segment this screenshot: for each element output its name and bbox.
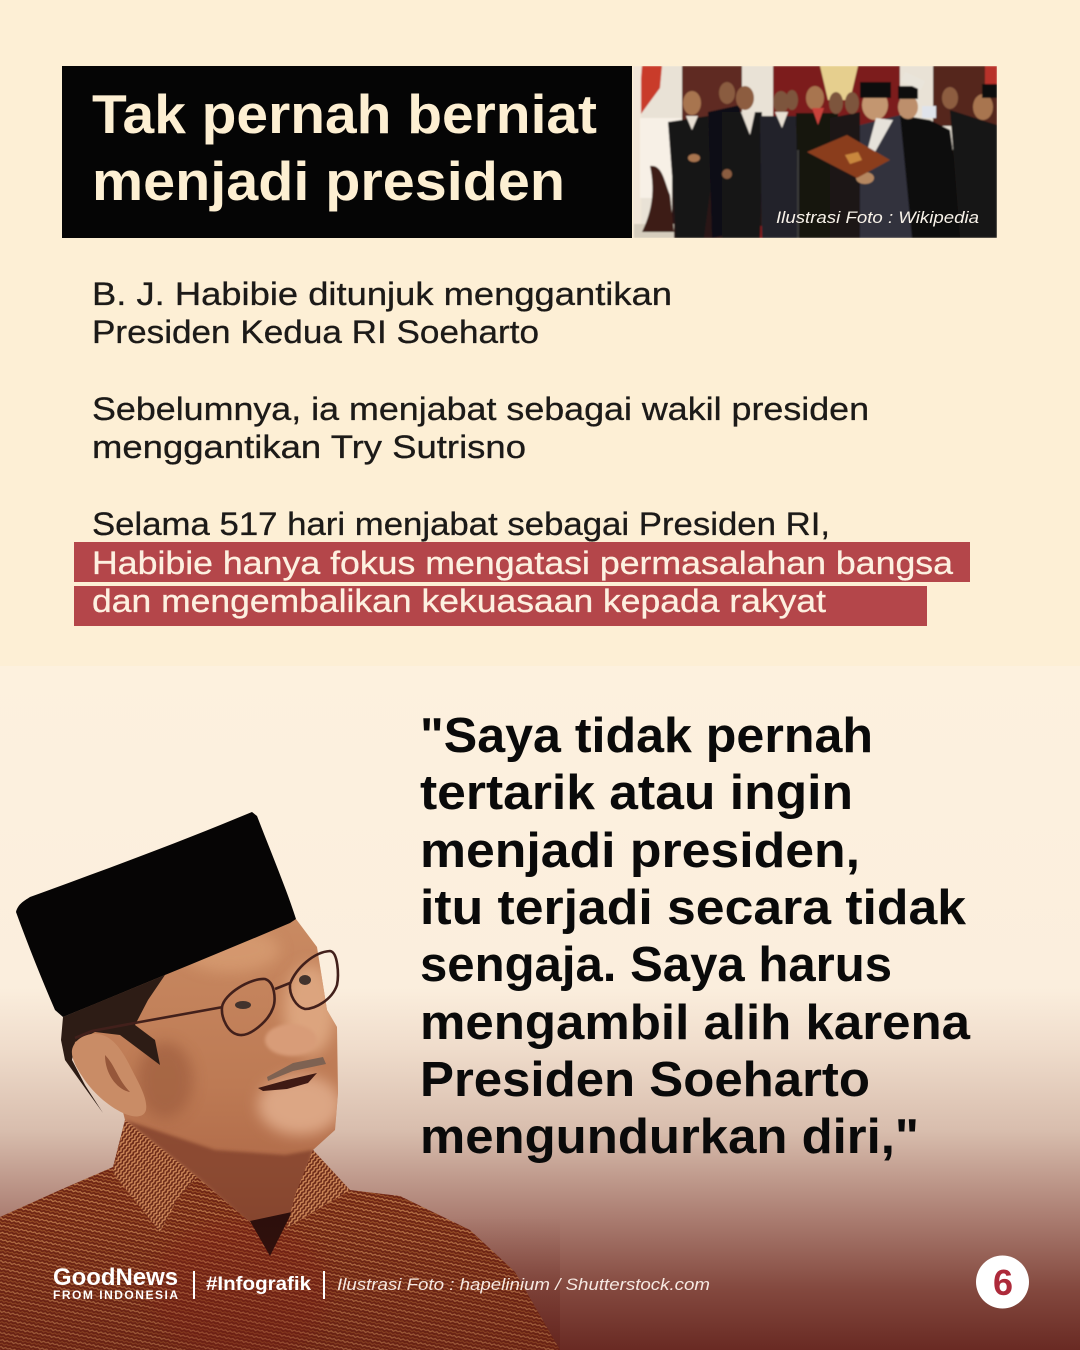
page number badge: 6 <box>993 1262 1013 1303</box>
quote: tertarik atau ingin <box>420 766 853 820</box>
page number badge <box>976 1256 1029 1308</box>
quote: itu terjadi secara tidak <box>420 881 967 935</box>
moustache <box>267 1057 326 1081</box>
text block: 517 days with highlight <box>74 506 970 626</box>
text block: 517 days with highlight: dan mengembalikan kekuasaan kepada rakyat <box>92 583 826 619</box>
title banner: menjadi presiden <box>92 150 565 212</box>
footer: photo credit: Ilustrasi Foto : hapelinium / Shutterstock.com <box>337 1275 710 1294</box>
text block: vice president: menggantikan Try Sutrisno <box>92 429 526 465</box>
ear <box>72 1034 146 1116</box>
eyes <box>235 1001 251 1009</box>
text block: 517 days with highlight: Habibie hanya fokus mengatasi permasalahan bangsa <box>92 545 953 581</box>
lower shading <box>0 1215 560 1350</box>
mouth <box>258 1073 317 1091</box>
shirt <box>0 1120 560 1350</box>
quote: mengambil alih karena <box>420 996 971 1050</box>
left collar <box>113 1120 197 1232</box>
shirt centre redder area <box>150 1220 330 1350</box>
quote: menjadi presiden, <box>420 824 860 878</box>
right collar <box>287 1150 350 1228</box>
text block: appointment: Presiden Kedua RI Soeharto <box>92 314 539 350</box>
background: top section <box>0 0 1080 666</box>
book held by the president <box>807 135 890 178</box>
title banner <box>62 66 632 238</box>
photo credit: Ilustrasi Foto : Wikipedia <box>776 209 979 227</box>
quote <box>420 709 971 1164</box>
text block: appointment: B. J. Habibie ditunjuk menggantikan <box>92 276 672 312</box>
hat (peci) <box>16 812 296 1017</box>
text block: appointment <box>92 276 672 350</box>
glasses <box>75 951 338 1038</box>
title banner: Tak pernah berniat <box>92 83 597 145</box>
face and neck <box>63 919 338 1222</box>
footer: hashtag: #Infografik <box>206 1274 311 1295</box>
footer: hashtag <box>193 1271 325 1299</box>
footer: logo: GoodNews <box>53 1264 178 1291</box>
nose <box>265 1024 317 1056</box>
hair <box>61 975 165 1113</box>
footer: logo: FROM INDONESIA <box>53 1288 178 1302</box>
quote: Presiden Soeharto <box>420 1053 870 1107</box>
portrait of Habibie <box>0 812 560 1350</box>
inner ear <box>105 1055 130 1092</box>
photo: inauguration ceremony <box>633 66 997 238</box>
face shading <box>125 928 342 1222</box>
background: bottom section with gradient <box>0 666 1080 1350</box>
text block: vice president <box>92 391 869 465</box>
text block: vice president: Sebelumnya, ia menjabat sebagai wakil presiden <box>92 391 869 427</box>
chest shadow <box>250 1212 292 1256</box>
quote: sengaja. Saya harus <box>420 938 892 992</box>
text block: 517 days with highlight: Selama 517 hari menjabat sebagai Presiden RI, <box>92 506 830 542</box>
group of officials <box>668 72 997 238</box>
quote: mengundurkan diri," <box>420 1110 919 1164</box>
quote: "Saya tidak pernah <box>420 709 873 763</box>
